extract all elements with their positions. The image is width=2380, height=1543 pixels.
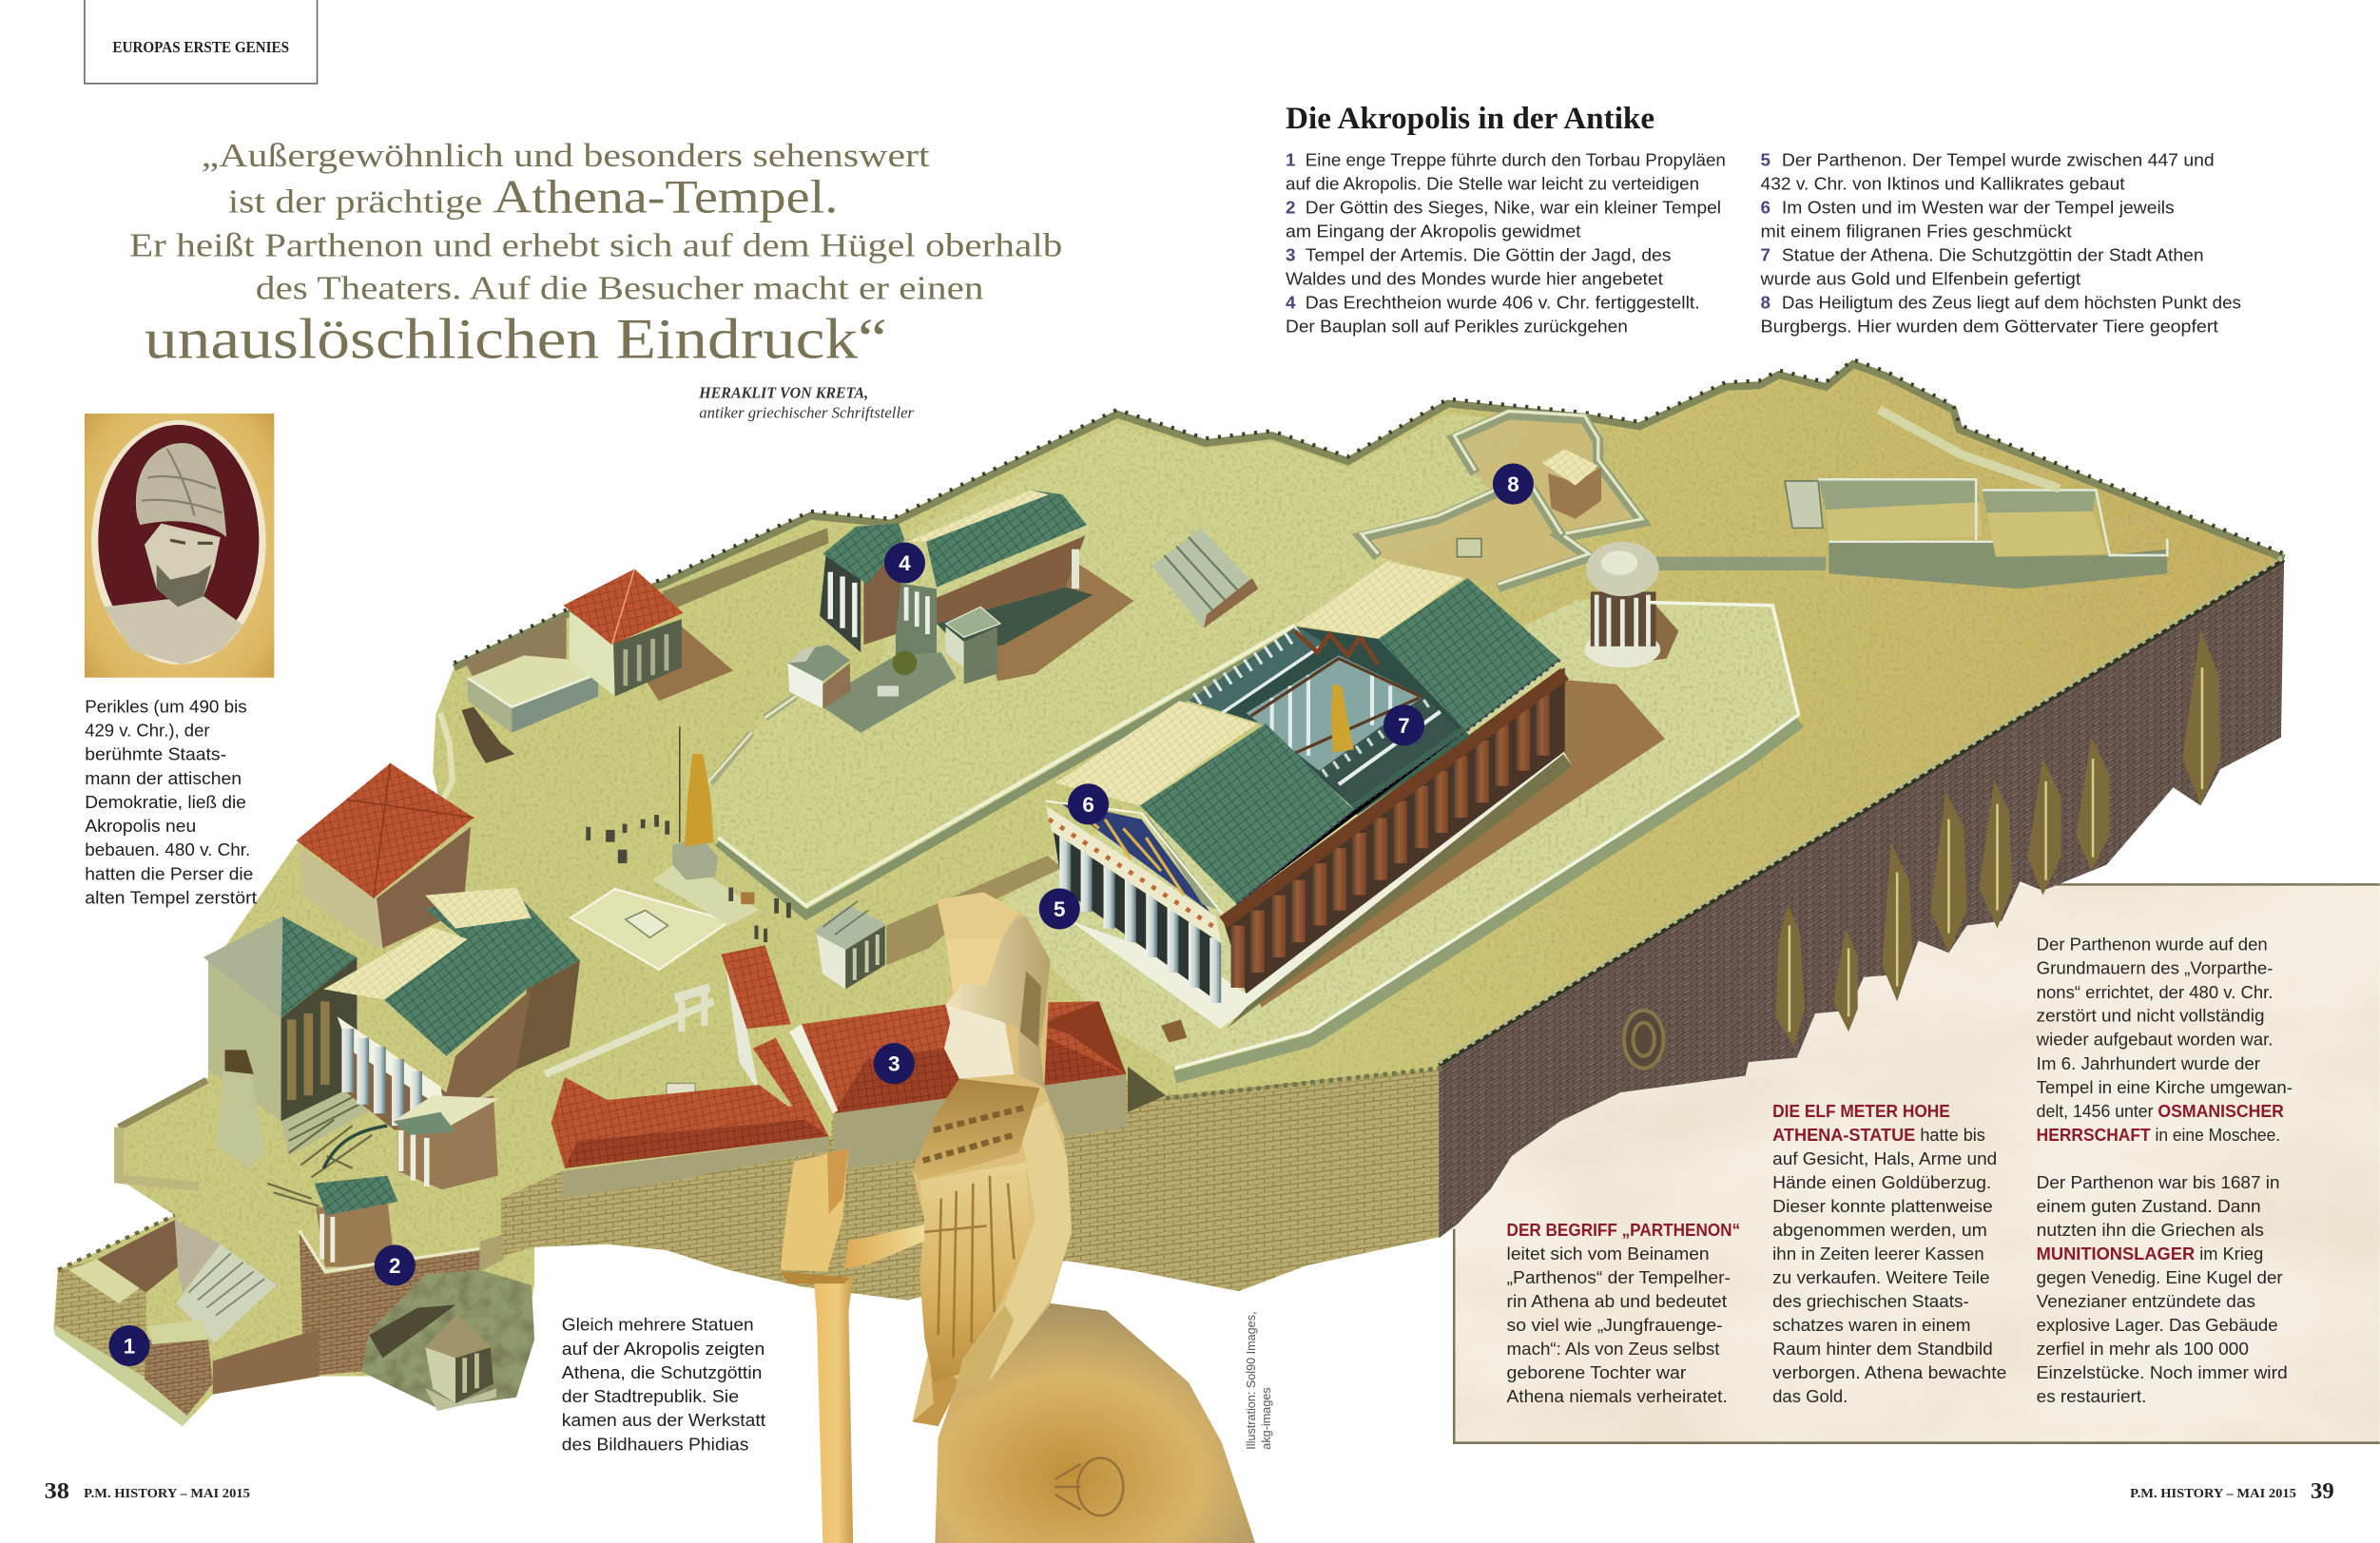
- text column: Der Parthenon history: Tempel in eine Kirche umgewan-: [2037, 1077, 2293, 1097]
- court retaining wall: [1175, 603, 1800, 1077]
- court wall at upper left: [119, 1080, 206, 1186]
- shield emblem: [1055, 1458, 1123, 1515]
- interior south corridor: [1319, 697, 1461, 805]
- rotunda: [1584, 542, 1678, 667]
- text column: Der Parthenon history: wieder aufgebaut worden war.: [2036, 1030, 2273, 1050]
- text column: Der Begriff Parthenon: so viel wie „Jungfrauenge-: [1507, 1315, 1723, 1335]
- quote attribution: antiker griechischer Schriftsteller: [699, 404, 915, 422]
- Parthenon interior: [1189, 627, 1466, 805]
- caption: Perikles: [85, 696, 257, 908]
- wall relief medallion: [1624, 1011, 1663, 1068]
- footer left: [45, 1478, 250, 1504]
- illustration: Akropolis bird's-eye view: [53, 359, 2284, 1426]
- legend: numbered list column 1: 4: [1286, 292, 1296, 312]
- text column: Der Parthenon history: einem guten Zustand. Dann: [2037, 1196, 2261, 1216]
- marker 1: 1: [124, 1335, 135, 1359]
- stoa west end: [551, 1077, 820, 1168]
- ground plateau: [53, 364, 2284, 1426]
- small altar with horse: [1161, 1019, 1187, 1042]
- text column: Der Parthenon history: Der Parthenon war bis 1687 in: [2037, 1172, 2279, 1192]
- left block brick: [55, 1260, 146, 1378]
- pull quote: Athena-Tempel.: [493, 170, 838, 222]
- text column: Die elf Meter hohe Athena-Statue: Raum hinter dem Standbild: [1772, 1339, 1993, 1359]
- helmet crest: [938, 892, 1018, 974]
- terrace edge wall: [718, 634, 1295, 915]
- interior cella floor: [1247, 655, 1423, 771]
- caption: Perikles: berühmte Staats-: [85, 744, 226, 764]
- Nike temple body: [316, 1199, 395, 1267]
- chest: [104, 596, 243, 665]
- text column: Die elf Meter hohe Athena-Statue: des griechischen Staats-: [1772, 1291, 1969, 1311]
- image credit: akg-images: [1259, 1387, 1273, 1450]
- Agrippa pedestal: [216, 1050, 266, 1168]
- right bastion wall: [1439, 560, 2284, 1238]
- marker 3: [874, 1043, 915, 1084]
- text column: Die elf Meter hohe Athena-Statue: ihn in Zeiten leerer Kassen: [1772, 1244, 1984, 1263]
- front curtain wall: [501, 1068, 1442, 1301]
- marker 2: [375, 1244, 416, 1285]
- stoa wall band: [562, 1067, 1166, 1199]
- caption: Perikles: mann der attischen: [85, 768, 242, 788]
- section tab: EUROPAS ERSTE GENIES: [112, 38, 289, 56]
- caption: Perikles: Perikles (um 490 bis: [85, 696, 247, 716]
- west wing left: [208, 960, 281, 1121]
- text column: Die elf Meter hohe Athena-Statue: DIE ELF METER HOHE: [1772, 1101, 1950, 1121]
- caption: Perikles: 429 v. Chr.), der: [85, 721, 210, 741]
- right shoulder and arm: [955, 1102, 1072, 1395]
- marker 7: 7: [1398, 714, 1410, 738]
- inner wall band behind the north-west wall: [662, 528, 829, 610]
- Parthenon colonnade side: [1222, 667, 1565, 993]
- entrance fortification: [53, 1215, 319, 1426]
- quote attribution: [698, 384, 915, 422]
- marker 7: [1383, 704, 1424, 745]
- image credit: Illustration: Sol90 Images,: [1244, 1311, 1258, 1450]
- text column: Der Parthenon history: nutzten ihn die Griechen als: [2037, 1220, 2264, 1240]
- Erechtheion base: [937, 588, 1093, 652]
- legend: numbered list column 2: wurde aus Gold und Elfenbein gefertigt: [1760, 268, 2081, 288]
- legend: numbered list column 2: Statue der Athena. Die Schutzgöttin der Stadt Athen: [1782, 244, 2204, 264]
- number markers: [108, 464, 1534, 1366]
- text column: Die elf Meter hohe Athena-Statue: Hände einen Goldüberzug.: [1772, 1172, 1991, 1192]
- Erechtheion brown wall: [937, 535, 1085, 624]
- gate building: [788, 663, 822, 708]
- south wing: [397, 1095, 498, 1189]
- Nike figure: [781, 1148, 848, 1271]
- caption: Athena statues: auf der Akropolis zeigten: [562, 1339, 764, 1359]
- red-roofed Pinakothek: [300, 827, 471, 948]
- footer left: 38: [45, 1478, 69, 1504]
- Athena statue with Nike, pillar and shield: [781, 892, 1255, 1543]
- shrine of Zeus: [1548, 468, 1601, 519]
- legend: numbered list column 2: 5: [1761, 149, 1770, 169]
- text column: Die elf Meter hohe Athena-Statue: ATHENA-STATUE hatte bis: [1772, 1125, 1985, 1145]
- small temple by the sanctuary wall: [814, 901, 886, 990]
- pull quote: [129, 137, 1062, 372]
- pillar: [814, 1276, 853, 1543]
- footer left: P.M. HISTORY – MAI 2015: [84, 1486, 250, 1500]
- raised terrace: [707, 413, 1533, 906]
- paved court around Parthenon: [995, 599, 1798, 1067]
- text column: Der Parthenon history: nons“ errichtet, der 480 v. Chr.: [2037, 982, 2273, 1002]
- statue base silhouette: [912, 892, 1072, 1426]
- small temple on the rock: [425, 1314, 496, 1411]
- marker 3: 3: [888, 1052, 900, 1076]
- north portico: [896, 583, 937, 655]
- right block brick: [145, 1340, 213, 1416]
- legend: numbered list column 2: 7: [1761, 244, 1770, 264]
- drapery folds: [924, 1176, 1014, 1358]
- legend: numbered list column 1: Eine enge Treppe führte durch den Torbau Propyläen: [1306, 149, 1726, 169]
- legend: numbered list column 1: Der Bauplan soll auf Perikles zurückgehen: [1286, 316, 1628, 336]
- marker 6: 6: [1082, 793, 1094, 817]
- caption: Perikles: bebauen. 480 v. Chr.: [85, 839, 250, 859]
- marker 1: [108, 1325, 150, 1366]
- legend: numbered list column 2: 432 v. Chr. von Iktinos und Kallikrates gebaut: [1761, 173, 2125, 193]
- inner pit wall: [97, 1220, 178, 1293]
- marker 6: [1068, 783, 1109, 824]
- terrace west of red temple: [440, 614, 598, 804]
- precinct temple enclosure: [1655, 410, 2167, 588]
- Parthenon roofs: [1055, 701, 1257, 805]
- building: Propylaea complex: [203, 763, 580, 1189]
- legend: numbered list column 1: am Eingang der Akropolis gewidmet: [1286, 221, 1581, 241]
- text column: Der Parthenon history: delt, 1456 unter OSMANISCHER: [2037, 1101, 2284, 1121]
- hair: [912, 1079, 1040, 1181]
- Zeus sanctuary: [1362, 411, 1642, 588]
- Parthenon shadow: [1248, 680, 1665, 1008]
- wall crenellation: [1166, 557, 2284, 1098]
- legend: numbered list column 2: mit einem filigranen Fries geschmückt: [1761, 221, 2072, 241]
- shield: [935, 1303, 1255, 1543]
- portrait: Perikles medallion: [85, 414, 274, 678]
- text column: Der Begriff Parthenon: geborene Tochter war: [1507, 1362, 1686, 1382]
- legend: numbered list column 1: Der Göttin des Sieges, Nike, war ein kleiner Tempel: [1306, 197, 1721, 217]
- legend: numbered list column 1: Waldes und des Mondes wurde hier angebetet: [1286, 268, 1664, 288]
- text column: Der Begriff Parthenon: Athena niemals verheiratet.: [1507, 1386, 1728, 1406]
- legend: numbered list column 1: [1286, 149, 1726, 336]
- caption: Athena statues: der Stadtrepublik. Sie: [562, 1386, 739, 1406]
- text column: Der Parthenon history: Der Parthenon wurde auf den: [2037, 935, 2268, 955]
- legend: numbered list column 2: [1760, 149, 2241, 336]
- panel: marble text background: [1454, 884, 2380, 1443]
- interior north colonnade: [1189, 627, 1325, 711]
- legend: numbered list column 1: 2: [1286, 197, 1296, 217]
- caption: Athena statues: Gleich mehrere Statuen: [562, 1315, 754, 1335]
- legend: numbered list column 2: 8: [1761, 292, 1770, 312]
- text column: Die elf Meter hohe Athena-Statue: das Gold.: [1772, 1386, 1848, 1406]
- pull quote: des Theaters. Auf die Besucher macht er einen: [256, 269, 984, 306]
- central hall: [345, 990, 532, 1130]
- text column: Die elf Meter hohe Athena-Statue: [1772, 1101, 2006, 1406]
- Erechtheion main roof: [926, 490, 1087, 588]
- legend: numbered list column 1: 3: [1286, 244, 1296, 264]
- text column: Der Parthenon history: HERRSCHAFT in eine Moschee.: [2037, 1125, 2280, 1145]
- marker 8: 8: [1507, 473, 1519, 496]
- heading: Die Akropolis in der Antike: Die Akropolis in der Antike: [1286, 102, 1654, 136]
- legend: numbered list column 2: Im Osten und im Westen war der Tempel jeweils: [1782, 197, 2175, 217]
- red-roofed stoa complex: [551, 945, 1126, 1168]
- wall buttresses: [1776, 629, 2220, 1047]
- text column: Der Parthenon history: explosive Lager. Das Gebäude: [2037, 1315, 2278, 1335]
- top of left block: [68, 1260, 140, 1303]
- legend: numbered list column 1: auf die Akropolis. Die Stelle war leicht zu verteidigen: [1286, 173, 1699, 193]
- pull quote: ist der prächtige: [228, 183, 482, 220]
- legend: numbered list column 2: Das Heiligtum des Zeus liegt auf dem höchsten Punkt des: [1782, 292, 2241, 312]
- text column: Der Begriff Parthenon: rin Athena ab und bedeutet: [1507, 1291, 1728, 1311]
- caryatid porch: [946, 627, 964, 667]
- text column: Der Parthenon history: Venezianer entzündete das: [2037, 1291, 2255, 1311]
- Erechtheion shadow: [991, 565, 1133, 682]
- text column: Die elf Meter hohe Athena-Statue: schatzes waren in einem: [1772, 1315, 1971, 1335]
- courtyard visitors: [586, 815, 791, 942]
- marker 5: 5: [1054, 897, 1065, 921]
- pull quote: „Außergewöhnlich und besonders sehenswert: [202, 137, 930, 174]
- caption: Athena statues: des Bildhauers Phidias: [562, 1434, 748, 1454]
- pull quote: Er heißt Parthenon und erhebt sich auf dem Hügel oberhalb: [129, 226, 1062, 263]
- caption: Perikles: Demokratie, ließ die: [85, 792, 246, 812]
- text column: Die elf Meter hohe Athena-Statue: Dieser konnte plattenweise: [1772, 1196, 1993, 1216]
- stone gate and altar: [667, 983, 710, 1105]
- building: red temple: [563, 569, 733, 701]
- text column: Der Begriff Parthenon: „Parthenos“ der Tempelher-: [1507, 1267, 1731, 1287]
- fortification base grass: [53, 1324, 195, 1426]
- legend: numbered list column 1: 1: [1286, 149, 1296, 169]
- footer right: P.M. HISTORY – MAI 2015: [2130, 1486, 2296, 1500]
- building: Erechtheion: [788, 490, 1133, 733]
- legend: numbered list column 2: Burgbergs. Hier wurden dem Göttervater Tiere geopfert: [1761, 316, 2219, 336]
- legend: numbered list column 1: Das Erechtheion wurde 406 v. Chr. fertiggestellt.: [1306, 292, 1700, 312]
- caption: Perikles: hatten die Perser die: [85, 863, 253, 883]
- text column: Der Parthenon history: MUNITIONSLAGER im Krieg: [2037, 1244, 2263, 1263]
- footer right: [2130, 1478, 2334, 1504]
- marker 4: [884, 543, 925, 584]
- text column: Die elf Meter hohe Athena-Statue: zu verkaufen. Weitere Teile: [1772, 1267, 1990, 1287]
- caption: Athena statues: [562, 1315, 765, 1454]
- quote attribution: HERAKLIT VON KRETA,: [698, 384, 868, 402]
- face: [944, 1004, 1014, 1079]
- crenellated back wall: [455, 359, 2284, 667]
- courtyard with olive tree: [822, 652, 957, 733]
- legend: numbered list column 2: 6: [1761, 197, 1770, 217]
- Parthenon: [1046, 561, 1665, 1029]
- text column: Der Parthenon history: gegen Venedig. Eine Kugel der: [2037, 1267, 2283, 1287]
- text column: Die elf Meter hohe Athena-Statue: verborgen. Athena bewachte: [1772, 1362, 2006, 1382]
- text column: Der Parthenon history: Grundmauern des „Vorparthe-: [2037, 958, 2273, 978]
- text column: Die elf Meter hohe Athena-Statue: abgenommen werden, um: [1772, 1220, 1987, 1240]
- legend: numbered list column 2: Der Parthenon. Der Tempel wurde zwischen 447 und: [1782, 149, 2215, 169]
- west porch: [863, 550, 904, 645]
- brick band under terrace: [886, 856, 1062, 965]
- marker 5: [1039, 888, 1080, 929]
- ramp stairs: [267, 1120, 387, 1206]
- Parthenon interior gold statue: [1331, 685, 1354, 753]
- footer right: 39: [2311, 1478, 2334, 1504]
- interior truss: [1295, 631, 1378, 665]
- text column: Der Parthenon history: es restauriert.: [2037, 1386, 2146, 1406]
- caption: Athena statues: Athena, die Schutzgöttin: [562, 1362, 762, 1382]
- Parthenon base steps: [1070, 751, 1573, 1029]
- text column: Der Parthenon history: Im 6. Jahrhundert wurde der: [2037, 1053, 2260, 1073]
- stoa L-wing: [667, 1038, 829, 1156]
- image credit: [1244, 1311, 1273, 1450]
- text column: Die elf Meter hohe Athena-Statue: auf Gesicht, Hals, Arme und: [1772, 1148, 1997, 1168]
- section tab: [85, 0, 318, 84]
- marker 4: 4: [899, 551, 911, 575]
- stoa main roof: [802, 1001, 1126, 1113]
- face and beard: [145, 524, 221, 607]
- lower dress strip: [912, 1350, 959, 1426]
- entrance stairs: [176, 1244, 277, 1342]
- text column: Der Parthenon history: zerstört und nicht vollständig: [2037, 1006, 2265, 1026]
- back green wing: [425, 896, 580, 990]
- bastion brick: [300, 1230, 480, 1376]
- caption: Perikles: alten Tempel zerstört: [85, 888, 257, 908]
- caption: Perikles: Akropolis neu: [85, 816, 196, 836]
- marker 8: [1493, 464, 1534, 505]
- marker 2: 2: [389, 1254, 400, 1278]
- courtyard platform and Athena Promachos: [571, 726, 791, 970]
- west wing steps: [281, 1085, 376, 1156]
- helmet bowl: [946, 916, 1051, 1088]
- text column: Der Parthenon history: zerfiel in mehr als 100 000: [2037, 1339, 2249, 1359]
- Nike bastion and temple: [300, 1176, 534, 1408]
- text column: Der Parthenon history: [2036, 935, 2293, 1406]
- stairs block: [1152, 528, 1258, 628]
- pull quote: unauslöschlichen Eindruck“: [145, 308, 887, 372]
- helmet shading: [1020, 971, 1041, 1047]
- text column: Der Begriff Parthenon: [1507, 1220, 1740, 1406]
- lower wall: [213, 1329, 319, 1395]
- text column: Der Begriff Parthenon: mach“: Als von Zeus selbst: [1507, 1339, 1720, 1359]
- text column: Der Parthenon history: Einzelstücke. Noch immer wird: [2037, 1362, 2288, 1382]
- caption: Athena statues: kamen aus der Werkstatt: [562, 1410, 765, 1430]
- low wall from Propylaea to the small temple: [545, 1001, 713, 1074]
- text column: Der Begriff Parthenon: leitet sich vom Beinamen: [1507, 1244, 1710, 1263]
- pit floor: [175, 1220, 221, 1293]
- rock outcrop: [361, 1270, 534, 1408]
- left arm: [844, 1225, 924, 1268]
- Parthenon entablature and pediment: [1046, 805, 1222, 944]
- legend: numbered list column 1: Tempel der Artemis. Die Göttin der Jagd, des: [1306, 244, 1671, 264]
- stoa north wing: [725, 955, 759, 1092]
- dress: [919, 1162, 1031, 1382]
- text column: Der Begriff Parthenon: DER BEGRIFF „PARTHENON“: [1507, 1220, 1740, 1240]
- helmet: [136, 443, 226, 537]
- Parthenon front columns: [1054, 832, 1217, 1001]
